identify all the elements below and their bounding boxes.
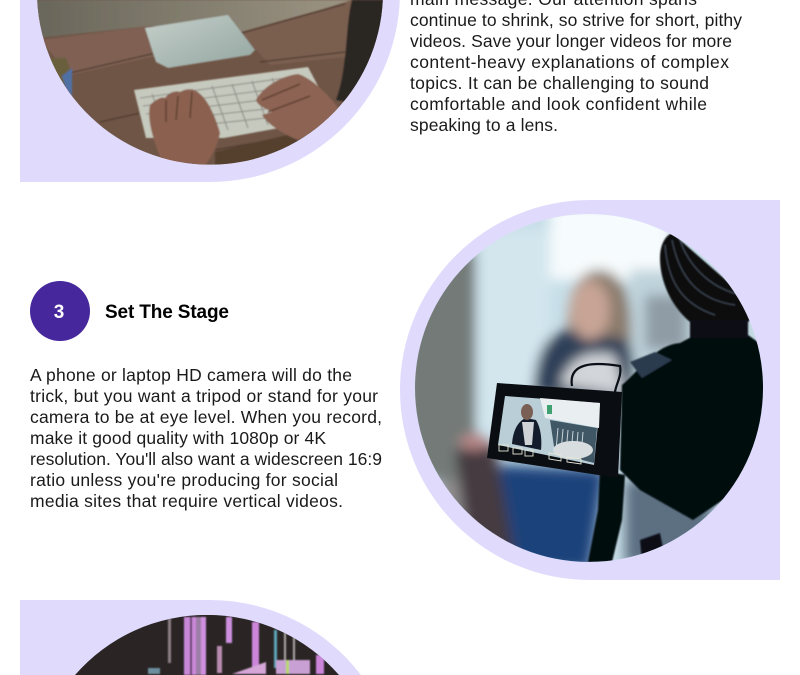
step 2 body text: speaking to a lens. <box>410 115 558 135</box>
blazer <box>533 330 634 400</box>
desk planks <box>40 26 160 75</box>
jeans <box>500 465 605 570</box>
step 3 body text: make it good quality with 1080p or 4K <box>30 428 326 448</box>
flip screen <box>487 383 622 478</box>
step 3 body text: camera to be at eye level. When you record, <box>30 407 382 427</box>
step 3 body text: A phone or laptop HD camera will do the <box>30 365 352 385</box>
lap and hand <box>455 445 515 560</box>
wall <box>37 0 352 38</box>
hair <box>568 270 631 370</box>
photo: camera filming a woman <box>415 214 763 562</box>
step 2 body text: continue to shrink, so strive for short, pithy <box>410 10 742 30</box>
step 3 body text: media sites that require vertical videos. <box>30 491 343 511</box>
step 3 body text: ratio unless you're producing for social <box>30 470 338 490</box>
monitor stand <box>145 15 255 68</box>
camera cable <box>572 364 620 392</box>
step 2 body text: comfortable and look confident while <box>410 94 707 114</box>
step 2 body text: videos. Save your longer videos for more <box>410 31 732 51</box>
heading: Set The Stage: Set The Stage <box>105 302 229 323</box>
step 3 body text <box>30 365 382 511</box>
step 3 body text: trick, but you want a tripod or stand for your <box>30 386 378 406</box>
step 2 body text: content-heavy explanations of complex <box>410 52 729 72</box>
number badge 3: 3 <box>54 302 64 323</box>
photo: hands typing on a keyboard <box>37 0 390 165</box>
photo: video editing timeline <box>75 615 339 675</box>
face <box>570 280 610 340</box>
coffee cup <box>48 58 72 98</box>
step 3 body text: resolution. You'll also want a widescreen 16:9 <box>30 449 382 469</box>
number badge 3 <box>30 281 90 341</box>
right hand <box>256 74 338 140</box>
shirt <box>560 353 625 395</box>
dark shadow at right <box>336 0 383 102</box>
microphone <box>660 233 760 322</box>
bottom desk shade <box>214 135 306 164</box>
panel: step 3 photo backdrop <box>400 200 780 580</box>
tripod <box>588 470 625 562</box>
left hand <box>149 89 220 165</box>
panel: step 4 photo backdrop <box>20 600 361 675</box>
keyboard <box>134 67 335 138</box>
camera body <box>588 233 775 562</box>
curtain <box>405 250 475 480</box>
panel: step 2 photo backdrop <box>20 0 400 182</box>
step 2 body text: topics. It can be challenging to sound <box>410 73 709 93</box>
step 2 body text <box>410 0 742 135</box>
